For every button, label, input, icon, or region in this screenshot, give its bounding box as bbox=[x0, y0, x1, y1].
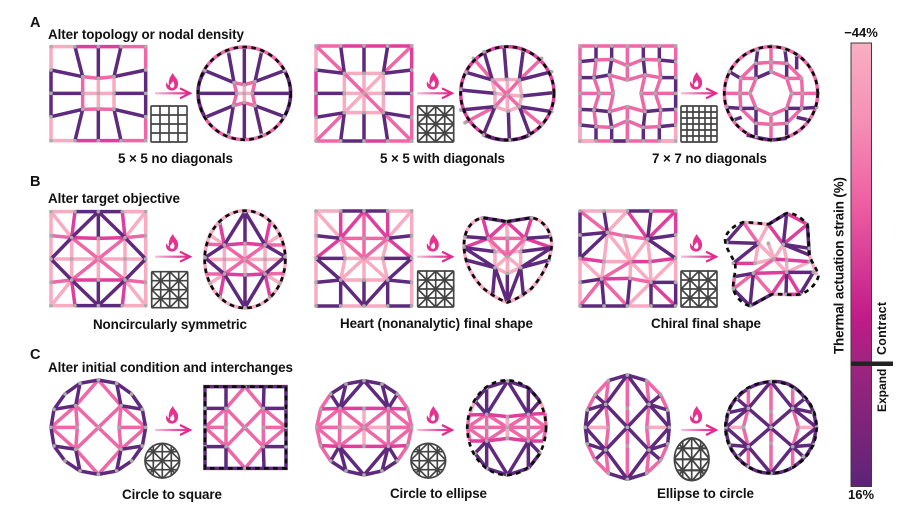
final shape: 7x7 no diagonals circle bbox=[724, 46, 818, 141]
final shape: ellipse bbox=[467, 380, 546, 475]
arrow bbox=[155, 425, 190, 435]
panel label B: B bbox=[30, 174, 40, 190]
icon: 5x5 mesh with diagonals bbox=[418, 106, 454, 142]
icon: flame bbox=[166, 73, 178, 91]
icon: mesh with diagonals bbox=[681, 271, 717, 307]
arrow bbox=[417, 88, 452, 98]
icon: flame bbox=[166, 406, 178, 424]
panel label A: A bbox=[30, 15, 41, 31]
icon: flame bbox=[690, 72, 702, 90]
heading B: Alter target objective bbox=[48, 191, 180, 206]
icon: 5x5 mesh bbox=[151, 106, 187, 142]
icon: mesh with diagonals bbox=[152, 272, 188, 308]
icon: 7x7 mesh bbox=[681, 106, 717, 142]
caption: Ellipse to circle bbox=[657, 486, 754, 501]
lattice: 7x7 no diagonals initial bbox=[580, 46, 676, 141]
lattice: heart initial bbox=[316, 211, 412, 306]
icon: circular mesh bbox=[144, 443, 180, 479]
lattice: circle initial bbox=[51, 380, 146, 474]
final shape: circle bbox=[725, 382, 817, 473]
icon: flame bbox=[427, 406, 439, 424]
icon: flame bbox=[427, 72, 439, 90]
final shape: 5x5 with diagonals circle bbox=[461, 47, 554, 140]
lattice: circle initial 2 bbox=[317, 381, 412, 475]
caption: 5 × 5 no diagonals bbox=[118, 151, 233, 166]
caption: 7 × 7 no diagonals bbox=[652, 151, 767, 166]
lattice: noncircularly symmetric initial bbox=[51, 212, 146, 306]
caption: Noncircularly symmetric bbox=[93, 317, 248, 332]
lattice: chiral initial bbox=[580, 211, 676, 306]
icon: flame bbox=[690, 406, 702, 424]
arrow bbox=[681, 425, 716, 435]
lattice: ellipse initial bbox=[585, 375, 669, 479]
arrow bbox=[681, 252, 716, 262]
caption: Circle to square bbox=[122, 487, 222, 502]
contract label: Contract bbox=[875, 301, 889, 355]
panel label C: C bbox=[30, 347, 41, 363]
final shape: heart bbox=[464, 218, 552, 302]
zero divider bbox=[851, 362, 893, 366]
bottom value: 16% bbox=[848, 487, 874, 502]
caption: Circle to ellipse bbox=[390, 486, 487, 501]
arrow bbox=[417, 252, 452, 262]
lattice: 5x5 with diagonals initial bbox=[316, 46, 412, 141]
caption: 5 × 5 with diagonals bbox=[380, 151, 505, 166]
heading C: Alter initial condition and interchanges bbox=[48, 360, 293, 375]
caption: Heart (nonanalytic) final shape bbox=[340, 316, 533, 331]
colour bar: thermal actuation strain bbox=[832, 25, 893, 502]
icon: mesh with diagonals bbox=[418, 271, 454, 307]
icon: flame bbox=[166, 234, 178, 252]
final shape: square bbox=[205, 387, 286, 468]
final shape: 5x5 no diagonals circle bbox=[198, 47, 291, 140]
icon: circular mesh bbox=[410, 443, 446, 479]
final shape: chiral bbox=[725, 213, 818, 306]
heading A: Alter topology or nodal density bbox=[48, 27, 245, 42]
arrow bbox=[155, 252, 190, 262]
axis title: Thermal actuation strain (%) bbox=[832, 177, 846, 354]
lattice: 5x5 no diagonals initial bbox=[51, 47, 146, 141]
arrow bbox=[681, 88, 716, 98]
icon: elliptical mesh bbox=[674, 437, 710, 481]
caption: Chiral final shape bbox=[651, 316, 761, 331]
arrow bbox=[155, 88, 190, 98]
expand label: Expand bbox=[875, 369, 889, 412]
gradient bar bbox=[851, 43, 872, 486]
icon: flame bbox=[427, 234, 439, 252]
icon: flame bbox=[690, 234, 702, 252]
final shape: noncircular ellipse bbox=[205, 211, 285, 308]
top value: −44% bbox=[844, 25, 878, 40]
arrow bbox=[417, 425, 452, 435]
